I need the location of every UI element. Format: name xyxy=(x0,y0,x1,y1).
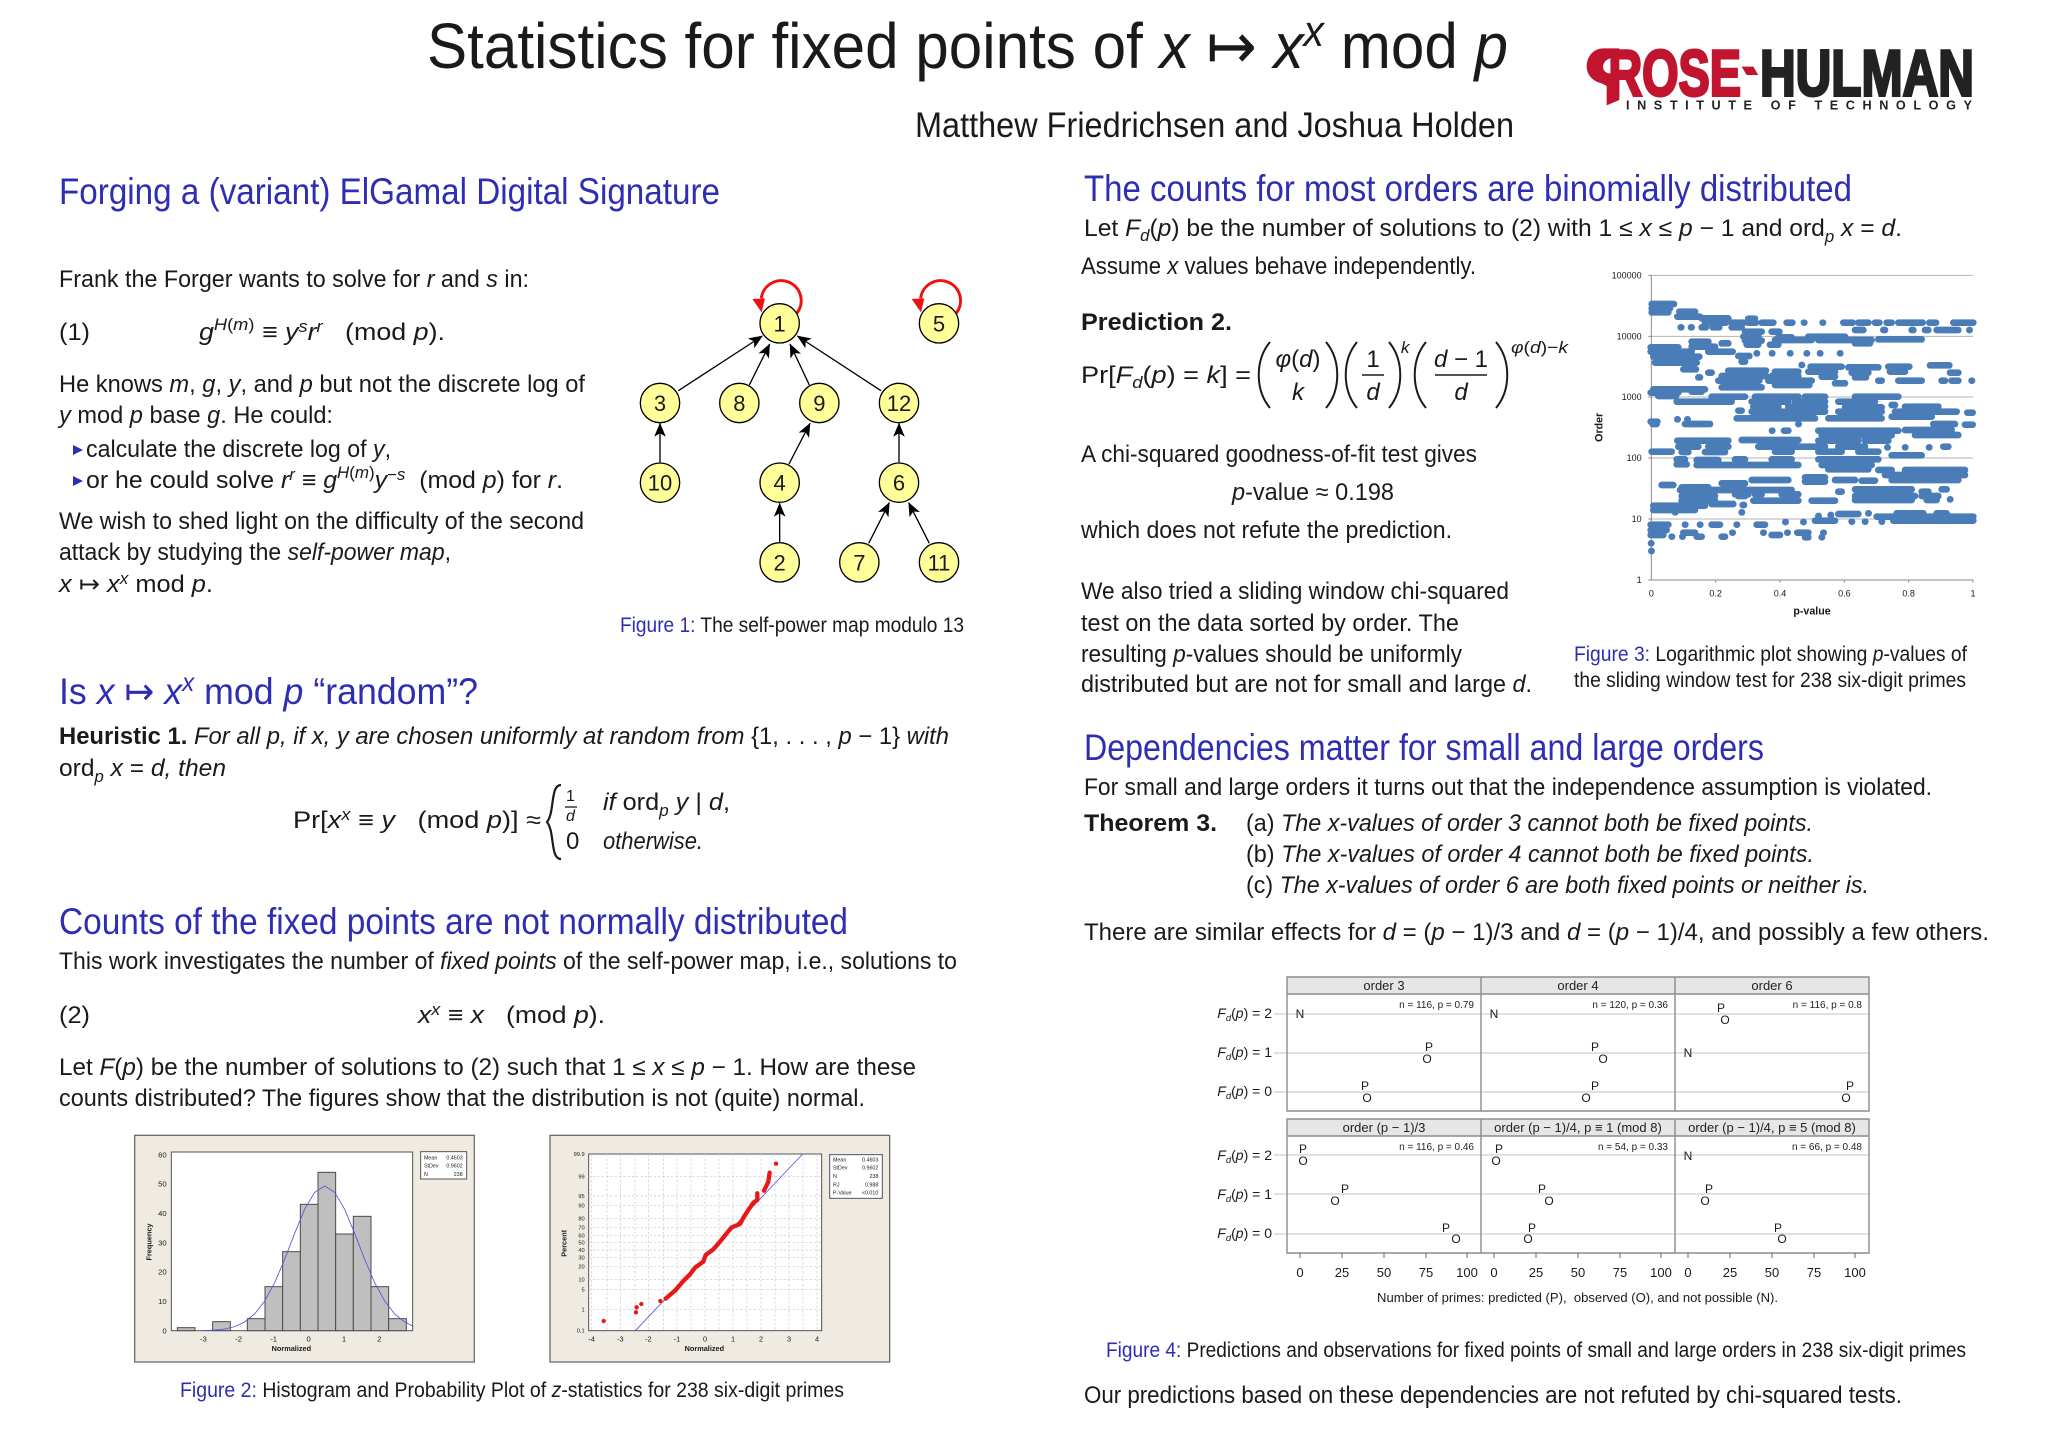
formula: probability cases: x xyxy=(340,806,351,824)
title: mod xyxy=(1324,10,1475,82)
chart: self-power map graph: 1 xyxy=(774,311,786,336)
text block: forger problem: (1) xyxy=(59,319,90,346)
logo: Rose-Hulman xyxy=(1587,36,1974,112)
text block: forger problem: −s xyxy=(387,466,405,484)
chart: predictions vs observations: F xyxy=(1217,1044,1232,1063)
chart: predictions vs observations: n = 120, p = 0.36 xyxy=(1592,1000,1668,1011)
chart: self-power map graph: 7 xyxy=(853,550,865,575)
chart: predictions vs observations: N xyxy=(1684,1149,1692,1163)
chart: predictions vs observations: order (p − 1)/3 xyxy=(1343,1120,1425,1135)
chart: probability plot: 60 xyxy=(578,1233,585,1239)
chart: probability plot: 95 xyxy=(578,1194,585,1200)
chart: histogram: 20 xyxy=(158,1268,167,1277)
text block: forger problem: We wish to shed light on the difficulty of the second xyxy=(59,508,584,535)
text block: forger problem: H(m) xyxy=(337,464,374,482)
chart: probability plot: 238 xyxy=(869,1174,878,1180)
chart: probability plot: -4 xyxy=(588,1334,595,1343)
chart: predictions vs observations: d xyxy=(1226,1155,1232,1166)
formula: prediction 2: d − 1 xyxy=(1434,346,1488,373)
chart: predictions vs observations: n = 116, p = 0.79 xyxy=(1399,1000,1474,1011)
chart: predictions vs observations: p) = 2 xyxy=(1236,1005,1272,1021)
formula: prediction 2: d xyxy=(1366,379,1380,406)
chart: histogram: 0.4603 xyxy=(446,1155,463,1161)
text block: forger problem: y mod p base g. He could: xyxy=(57,402,333,429)
chart: probability plot: 70 xyxy=(578,1226,585,1232)
chart: p-value scatter: 10000 xyxy=(1617,331,1642,341)
chart: probability plot: 0.4603 xyxy=(862,1157,878,1163)
chart: predictions vs observations: N xyxy=(1684,1046,1692,1060)
chart: self-power map graph: 11 xyxy=(928,550,950,575)
chart: predictions vs observations: Number of primes: predicted (P), observed (O), and not possible (N). xyxy=(1377,1290,1778,1305)
chart: p-value scatter: 100000 xyxy=(1612,270,1642,280)
formula: prediction 2: p) = k] = xyxy=(1152,362,1247,389)
heading: random: x xyxy=(181,669,196,697)
text block: fixed points: This work investigates the number of fixed points of the self-power map, i.e., solutions to xyxy=(59,948,957,975)
chart: predictions vs observations: d xyxy=(1226,1091,1232,1102)
chart: p-value scatter: Order xyxy=(1594,413,1606,442)
text block: chi-squared: resulting p-values should be uniformly xyxy=(1081,641,1462,668)
chart: predictions vs observations: O xyxy=(1777,1232,1787,1246)
chart: predictions vs observations: P xyxy=(1299,1142,1307,1156)
text block: theorem 3: For small and large orders it turns out that the independence assumption is violated. xyxy=(1084,774,1932,801)
title: Statistics for fixed points of x ↦ x xyxy=(427,10,1305,82)
text block: forger problem: s xyxy=(298,318,308,336)
chart: predictions vs observations: 100 xyxy=(1650,1265,1672,1280)
text block: theorem 3: Theorem 3. xyxy=(1084,810,1217,837)
chart: predictions vs observations: 0 xyxy=(1296,1265,1304,1280)
chart: probability plot: StDev xyxy=(833,1166,848,1172)
chart: self-power map graph: 4 xyxy=(774,471,786,496)
chart: p-value scatter: p-value xyxy=(1793,606,1831,618)
chart: predictions vs observations: O xyxy=(1330,1194,1340,1208)
chart: predictions vs observations: p) = 0 xyxy=(1236,1083,1272,1099)
chart: predictions vs observations: P xyxy=(1591,1079,1599,1093)
chart: predictions vs observations: P xyxy=(1442,1221,1450,1235)
chart: probability plot: 80 xyxy=(578,1217,585,1223)
text block: fixed points: x (mod p). xyxy=(471,1002,603,1029)
chart: predictions vs observations: p) = 0 xyxy=(1236,1225,1272,1241)
chart: predictions vs observations: O xyxy=(1523,1232,1533,1246)
text block: definition xyxy=(1081,215,1902,280)
chart: predictions vs observations: P xyxy=(1495,1142,1503,1156)
text block: heuristic 1: Heuristic 1. For all p, if x, y are chosen uniformly at random from {1, . . . , p − 1} with xyxy=(59,723,949,750)
text block: fixed points xyxy=(59,948,957,1112)
text block: forger problem: p) for r. xyxy=(483,467,563,494)
chart: probability plot: 30 xyxy=(578,1256,585,1262)
chart: predictions vs observations: P xyxy=(1717,1001,1725,1015)
chart: predictions vs observations: O xyxy=(1700,1194,1710,1208)
text block: chi-squared: We also tried a sliding window chi-squared xyxy=(1081,578,1509,605)
chart: probability plot: 4 xyxy=(815,1334,819,1343)
formula: prediction 2: φ(d)−k xyxy=(1511,338,1570,357)
chart: probability plot: Normalized xyxy=(685,1344,724,1353)
chart: self-power map graph: 8 xyxy=(733,391,745,416)
chart: histogram: N xyxy=(424,1172,428,1178)
text block: forger problem: ≡ xyxy=(295,467,323,494)
chart: probability plot: 99 xyxy=(578,1174,585,1180)
chart: self-power map graph: 6 xyxy=(893,471,905,496)
chart: histogram: Mean xyxy=(424,1155,437,1161)
text block: theorem 3: (a) The x-values of order 3 cannot both be fixed points. xyxy=(1246,810,1813,837)
authors: Matthew Friedrichsen and Joshua Holden xyxy=(915,106,1514,145)
text block: forger problem: ≡ xyxy=(254,319,285,346)
text block: forger problem: g xyxy=(323,467,338,494)
chart: predictions vs observations: ( xyxy=(1231,1044,1236,1060)
formula: probability cases: ≡ xyxy=(350,807,381,834)
chart: probability plot: 1 xyxy=(731,1334,735,1343)
text block: forger problem: p. xyxy=(192,571,213,598)
chart: predictions vs observations: F xyxy=(1217,1147,1232,1166)
chart: probability plot: N xyxy=(833,1174,837,1180)
chart: predictions vs observations: P xyxy=(1528,1221,1536,1235)
chart: probability plot: 0 xyxy=(703,1334,707,1343)
chart: predictions vs observations: N xyxy=(1490,1007,1498,1021)
chart: predictions vs observations: order 6 xyxy=(1751,978,1793,993)
chart: histogram: 1 xyxy=(342,1334,346,1343)
chart: probability plot: 0.1 xyxy=(577,1329,585,1335)
chart: probability plot: -3 xyxy=(617,1334,624,1343)
chart: probability plot: 50 xyxy=(578,1240,585,1246)
text block: forger problem: (mod xyxy=(323,319,414,346)
text block: fixed points: x xyxy=(430,1001,441,1019)
formula: prediction 2: ( xyxy=(1142,362,1152,389)
text block: definition: x xyxy=(1834,215,1854,242)
text block: forger problem xyxy=(57,266,585,598)
chart: predictions vs observations: O xyxy=(1491,1154,1501,1168)
chart: probability plot: -2 xyxy=(645,1334,652,1343)
chart: probability plot: 10 xyxy=(578,1277,585,1283)
formula: prediction 2: Prediction 2. xyxy=(1081,309,1232,336)
chart: predictions vs observations: 25 xyxy=(1723,1265,1737,1280)
chart: histogram xyxy=(135,1135,474,1362)
formula: prediction 2: d xyxy=(1132,374,1144,392)
chart: predictions vs observations: P xyxy=(1591,1040,1599,1054)
chart: p-value scatter: 1 xyxy=(1637,575,1642,585)
chart: histogram: 40 xyxy=(158,1209,167,1218)
chart: self-power map graph: 9 xyxy=(813,391,825,416)
chart: predictions vs observations: P xyxy=(1341,1182,1349,1196)
chart: probability plot: RJ xyxy=(833,1182,840,1188)
text block: fixed points: x xyxy=(417,1002,432,1029)
chart: p-value scatter: 1000 xyxy=(1622,392,1642,402)
text block: forger problem: or he could solve r xyxy=(86,467,289,494)
chart: predictions vs observations: n = 116, p = 0.46 xyxy=(1399,1142,1474,1153)
chart: predictions vs observations: 0 xyxy=(1684,1265,1692,1280)
chart: predictions vs observations: 50 xyxy=(1377,1265,1391,1280)
chart: probability plot: 2 xyxy=(759,1334,763,1343)
chart: predictions vs observations: P xyxy=(1425,1040,1433,1054)
chart: predictions vs observations: ( xyxy=(1231,1147,1236,1163)
chart: predictions vs observations: O xyxy=(1362,1091,1372,1105)
text block: chi-squared: A chi-squared goodness-of-fit test gives xyxy=(1081,441,1477,468)
formula: probability cases: d xyxy=(566,808,576,825)
text block: definition: p xyxy=(1824,228,1834,246)
chart: predictions vs observations: O xyxy=(1298,1154,1308,1168)
formula: probability cases: y (mod p)] ≈ xyxy=(381,807,537,834)
chart: histogram: 238 xyxy=(454,1172,463,1178)
text block: forger problem: x xyxy=(119,570,129,588)
text block: chi-squared: p-value ≈ 0.198 xyxy=(1231,479,1394,506)
chart: self-power map graph: 3 xyxy=(654,391,666,416)
chart: predictions vs observations: O xyxy=(1598,1052,1608,1066)
formula: prediction 2: φ(d) xyxy=(1275,346,1321,373)
chart: self-power map graph: 12 xyxy=(887,391,911,416)
chart: predictions vs observations: order (p − 1)/4, p ≡ 5 (mod 8) xyxy=(1688,1120,1856,1135)
logo: Rose-Hulman: INSTITUTE OF TECHNOLOGY xyxy=(1626,98,1973,112)
text block: heuristic 1: p xyxy=(93,768,104,786)
chart: probability plot: <0.010 xyxy=(862,1191,878,1197)
text block: heuristic 1 xyxy=(59,723,949,786)
chart: predictions vs observations: order (p − 1)/4, p ≡ 1 (mod 8) xyxy=(1494,1120,1662,1135)
formula: probability cases: p xyxy=(658,802,669,820)
chart: predictions vs observations: d xyxy=(1226,1194,1232,1205)
text block: definition: p) be the number of solutions to (2) with 1 ≤ x ≤ p − 1 and ord xyxy=(1158,215,1821,242)
chart: predictions vs observations: F xyxy=(1217,1005,1232,1024)
chart: self-power map graph: 5 xyxy=(933,311,945,336)
formula: probability cases: 0 xyxy=(566,828,579,855)
formula: probability cases: otherwise. xyxy=(603,828,703,855)
chart: predictions vs observations: P xyxy=(1705,1182,1713,1196)
chart: probability plot: 40 xyxy=(578,1248,585,1254)
text block: fixed points: ≡ xyxy=(440,1002,471,1029)
formula: probability cases: y xyxy=(669,789,690,816)
chart: predictions vs observations: 50 xyxy=(1765,1265,1779,1280)
chart: predictions vs observations: 75 xyxy=(1613,1265,1627,1280)
formula: prediction 2: 1 xyxy=(1366,346,1380,373)
formula: probability cases: Pr[x xyxy=(293,807,340,834)
formula: probability cases: if ord xyxy=(603,789,657,816)
text block: forger problem: x ↦ x xyxy=(59,571,119,598)
caption: figure 3: the sliding window test for 238 six-digit primes xyxy=(1574,668,1966,692)
heading: binomial: The counts for most orders are binomially distributed xyxy=(1084,168,1852,209)
chart: p-value scatter: 0 xyxy=(1649,589,1654,599)
text block: forger problem: mod xyxy=(128,571,192,598)
formula: prediction 2: k xyxy=(1401,338,1411,357)
heading: random: p “random”? xyxy=(284,671,484,712)
title: x xyxy=(1302,8,1326,56)
chart: histogram: Frequency xyxy=(145,1223,154,1261)
text block: forger problem: (mod xyxy=(405,467,483,494)
chart: predictions vs observations: P xyxy=(1774,1221,1782,1235)
text block: definition: ( xyxy=(1149,215,1158,242)
chart: self-power map graph: 2 xyxy=(774,550,786,575)
chart: histogram: 60 xyxy=(158,1150,167,1159)
chart: histogram: -2 xyxy=(235,1334,242,1343)
chart: predictions vs observations: order 4 xyxy=(1557,978,1599,993)
heading: counts: Counts of the fixed points are not normally distributed xyxy=(59,901,848,942)
panel: dependencies xyxy=(1084,727,1989,1409)
chart: predictions vs observations: p) = 1 xyxy=(1236,1044,1272,1060)
text block: theorem 3 xyxy=(1084,774,1989,946)
text block: chi-squared: distributed but are not for small and large d. xyxy=(1081,671,1532,698)
text block: fixed points: Let F(p) be the number of solutions to (2) such that 1 ≤ x ≤ p − 1. How are these xyxy=(59,1054,916,1081)
text block: forger problem: r xyxy=(289,466,295,484)
text block: definition: Assume x values behave independently. xyxy=(1081,253,1476,280)
text block: forger problem: H(m) xyxy=(214,316,254,334)
chart: p-value scatter: 0.4 xyxy=(1774,589,1786,599)
chart: histogram: 30 xyxy=(158,1238,167,1247)
text block: heuristic 1: x xyxy=(104,755,124,782)
heading: random: Is x ↦ x xyxy=(59,671,183,712)
chart: predictions vs observations: 0 xyxy=(1490,1265,1498,1280)
chart: probability plot: 90 xyxy=(578,1204,585,1210)
text block: forger problem: g xyxy=(199,319,215,346)
chart: histogram: 0 xyxy=(162,1326,167,1335)
chart: predictions vs observations: O xyxy=(1841,1091,1851,1105)
chart: predictions vs observations: O xyxy=(1422,1052,1432,1066)
formula: prediction 2: k xyxy=(1292,379,1306,406)
chart: predictions vs observations: P xyxy=(1361,1079,1369,1093)
text block: conclusion: Our predictions based on these dependencies are not refuted by chi-squared tests. xyxy=(1084,1382,1902,1409)
heading: random: mod xyxy=(194,671,284,712)
chart: predictions vs observations: 25 xyxy=(1335,1265,1349,1280)
chart: histogram: 0 xyxy=(307,1334,311,1343)
chart: histogram: 50 xyxy=(158,1180,167,1189)
text block: definition: d xyxy=(1140,227,1150,245)
chart: predictions vs observations: d xyxy=(1226,1052,1232,1063)
chart: predictions vs observations: d xyxy=(1226,1013,1232,1024)
heading: dependencies: Dependencies matter for small and large orders xyxy=(1084,727,1764,768)
chart: predictions vs observations: O xyxy=(1720,1013,1730,1027)
chart: predictions vs observations: 50 xyxy=(1571,1265,1585,1280)
chart: predictions vs observations xyxy=(1217,977,1869,1305)
chart: probability plot: 5 xyxy=(582,1288,585,1294)
text block: forger problem: y xyxy=(373,467,389,494)
text block: definition: = d. xyxy=(1860,215,1902,242)
text block: forger problem: Frank the Forger wants to solve for r and s in: xyxy=(59,266,529,293)
chart: probability plot: 20 xyxy=(578,1265,585,1271)
chart: predictions vs observations: p) = 2 xyxy=(1236,1147,1272,1163)
chart: predictions vs observations: F xyxy=(1217,1225,1232,1244)
panel: binomial counts xyxy=(1080,168,1975,698)
chart: predictions vs observations: p) = 1 xyxy=(1236,1186,1272,1202)
chart: predictions vs observations: order 3 xyxy=(1363,978,1405,993)
chart: probability plot: 1 xyxy=(582,1307,585,1313)
chart: p-value scatter: 0.8 xyxy=(1902,589,1915,599)
text block: theorem 3: (b) The x-values of order 4 cannot both be fixed points. xyxy=(1246,841,1814,868)
chart: probability plot: 99.9 xyxy=(574,1152,585,1158)
caption: figure 1: Figure 1: The self-power map modulo 13 xyxy=(620,613,964,637)
formula: prediction 2: d xyxy=(1454,379,1468,406)
chart: p-value scatter: 0.6 xyxy=(1838,589,1851,599)
text block: fixed points: counts distributed? The figures show that the distribution is not (quite) normal. xyxy=(59,1085,865,1112)
chart: self-power map graph xyxy=(640,281,961,582)
chart: probability plot: Mean xyxy=(833,1157,846,1163)
text block: chi-squared: test on the data sorted by order. The xyxy=(1081,610,1459,637)
chart: probability plot: -1 xyxy=(674,1334,680,1343)
formula: probability cases xyxy=(293,785,730,859)
formula: probability cases: 1 xyxy=(566,788,575,805)
chart: predictions vs observations: 100 xyxy=(1456,1265,1478,1280)
chart: predictions vs observations: ( xyxy=(1231,1005,1236,1021)
logo: Rose-Hulman: HULMAN xyxy=(1760,36,1974,109)
text block: theorem 3: (c) The x-values of order 6 are both fixed points or neither is. xyxy=(1246,872,1869,899)
text block: heuristic 1: ord xyxy=(59,755,94,782)
panel: forging a signature xyxy=(57,171,964,637)
chart: histogram: 0.9602 xyxy=(446,1164,463,1170)
chart: predictions vs observations: 75 xyxy=(1419,1265,1433,1280)
chart: histogram: Normalized xyxy=(272,1344,311,1353)
chart: predictions vs observations: F xyxy=(1217,1083,1232,1102)
chart: probability plot: P-Value xyxy=(833,1191,852,1197)
text block: forger problem: He knows m, g, y, and p but not the discrete log of xyxy=(59,371,585,398)
chart: predictions vs observations: 100 xyxy=(1844,1265,1866,1280)
chart: predictions vs observations: O xyxy=(1451,1232,1461,1246)
caption: figure 3 xyxy=(1574,642,1967,692)
text block: forger problem: y xyxy=(283,319,301,346)
chart: predictions vs observations: O xyxy=(1581,1091,1591,1105)
formula: prediction 2: Pr[F xyxy=(1081,362,1130,389)
chart: p-value scatter xyxy=(1594,270,1975,618)
chart: predictions vs observations: ( xyxy=(1231,1186,1236,1202)
chart: self-power map graph: 10 xyxy=(648,471,672,496)
text block: forger problem: p). xyxy=(414,319,443,346)
chart: predictions vs observations: n = 116, p = 0.8 xyxy=(1793,1000,1862,1011)
caption: figure 2: Figure 2: Histogram and Probability Plot of z-statistics for 238 six-digit primes xyxy=(180,1378,844,1402)
chart: predictions vs observations: n = 66, p = 0.48 xyxy=(1792,1142,1862,1153)
caption: figure 4: Figure 4: Predictions and observations for fixed points of small and large orders in 238 six-digit primes xyxy=(1106,1338,1966,1362)
chart: probability plot: 0.988 xyxy=(865,1182,878,1188)
text block: forger problem: attack by studying the self-power map, xyxy=(59,539,451,566)
text block: fixed points: (2) xyxy=(59,1002,90,1029)
chart: predictions vs observations: N xyxy=(1296,1007,1304,1021)
formula: prediction 2 xyxy=(1081,309,1570,408)
text block: chi-squared: which does not refute the prediction. xyxy=(1080,517,1452,544)
logo: Rose-Hulman: ROSE xyxy=(1608,36,1741,109)
chart: p-value scatter: 1 xyxy=(1970,589,1975,599)
text block: definition: Let F xyxy=(1084,215,1140,242)
formula: probability cases: | d, xyxy=(695,789,730,816)
title: p xyxy=(1473,10,1508,82)
chart: histogram: 10 xyxy=(158,1297,167,1306)
panel: counts of fixed points xyxy=(59,901,957,1402)
chart: histogram: -3 xyxy=(200,1334,207,1343)
text block: forger problem: r xyxy=(308,319,318,346)
chart: probability plot: 0.9602 xyxy=(862,1166,878,1172)
text block: heuristic 1: = d, then xyxy=(130,755,224,782)
chart: predictions vs observations: ( xyxy=(1231,1083,1236,1099)
chart: probability plot: Percent xyxy=(560,1229,569,1257)
caption: figure 3: Figure 3: Logarithmic plot showing p-values of xyxy=(1574,642,1967,666)
chart: predictions vs observations: P xyxy=(1846,1079,1854,1093)
text block: forger problem: r xyxy=(317,318,323,336)
panel: is the map random xyxy=(59,669,949,859)
chart: predictions vs observations: ( xyxy=(1231,1225,1236,1241)
chart: predictions vs observations: n = 54, p = 0.33 xyxy=(1598,1142,1668,1153)
chart: histogram: 2 xyxy=(377,1334,381,1343)
chart: predictions vs observations: 75 xyxy=(1807,1265,1821,1280)
chart: p-value scatter: 0.2 xyxy=(1709,589,1722,599)
chart: predictions vs observations: F xyxy=(1217,1186,1232,1205)
chart: histogram: -1 xyxy=(270,1334,277,1343)
text block: forger problem: calculate the discrete log of y, xyxy=(86,436,391,463)
chart: histogram: StDev xyxy=(424,1164,439,1170)
heading: forging: Forging a (variant) ElGamal Digital Signature xyxy=(59,171,720,212)
text block: theorem 3: There are similar effects for d = (p − 1)/3 and d = (p − 1)/4, and possibly a few others. xyxy=(1084,919,1989,946)
chart: probability plot: 3 xyxy=(787,1334,791,1343)
chart: predictions vs observations: 25 xyxy=(1529,1265,1543,1280)
chart: predictions vs observations: d xyxy=(1226,1233,1232,1244)
text block: chi-squared xyxy=(1080,441,1532,698)
chart: predictions vs observations: P xyxy=(1538,1182,1546,1196)
chart: p-value scatter: 100 xyxy=(1627,453,1642,463)
chart: predictions vs observations: O xyxy=(1544,1194,1554,1208)
chart: probability plot xyxy=(550,1135,890,1362)
chart: p-value scatter: 10 xyxy=(1632,514,1642,524)
